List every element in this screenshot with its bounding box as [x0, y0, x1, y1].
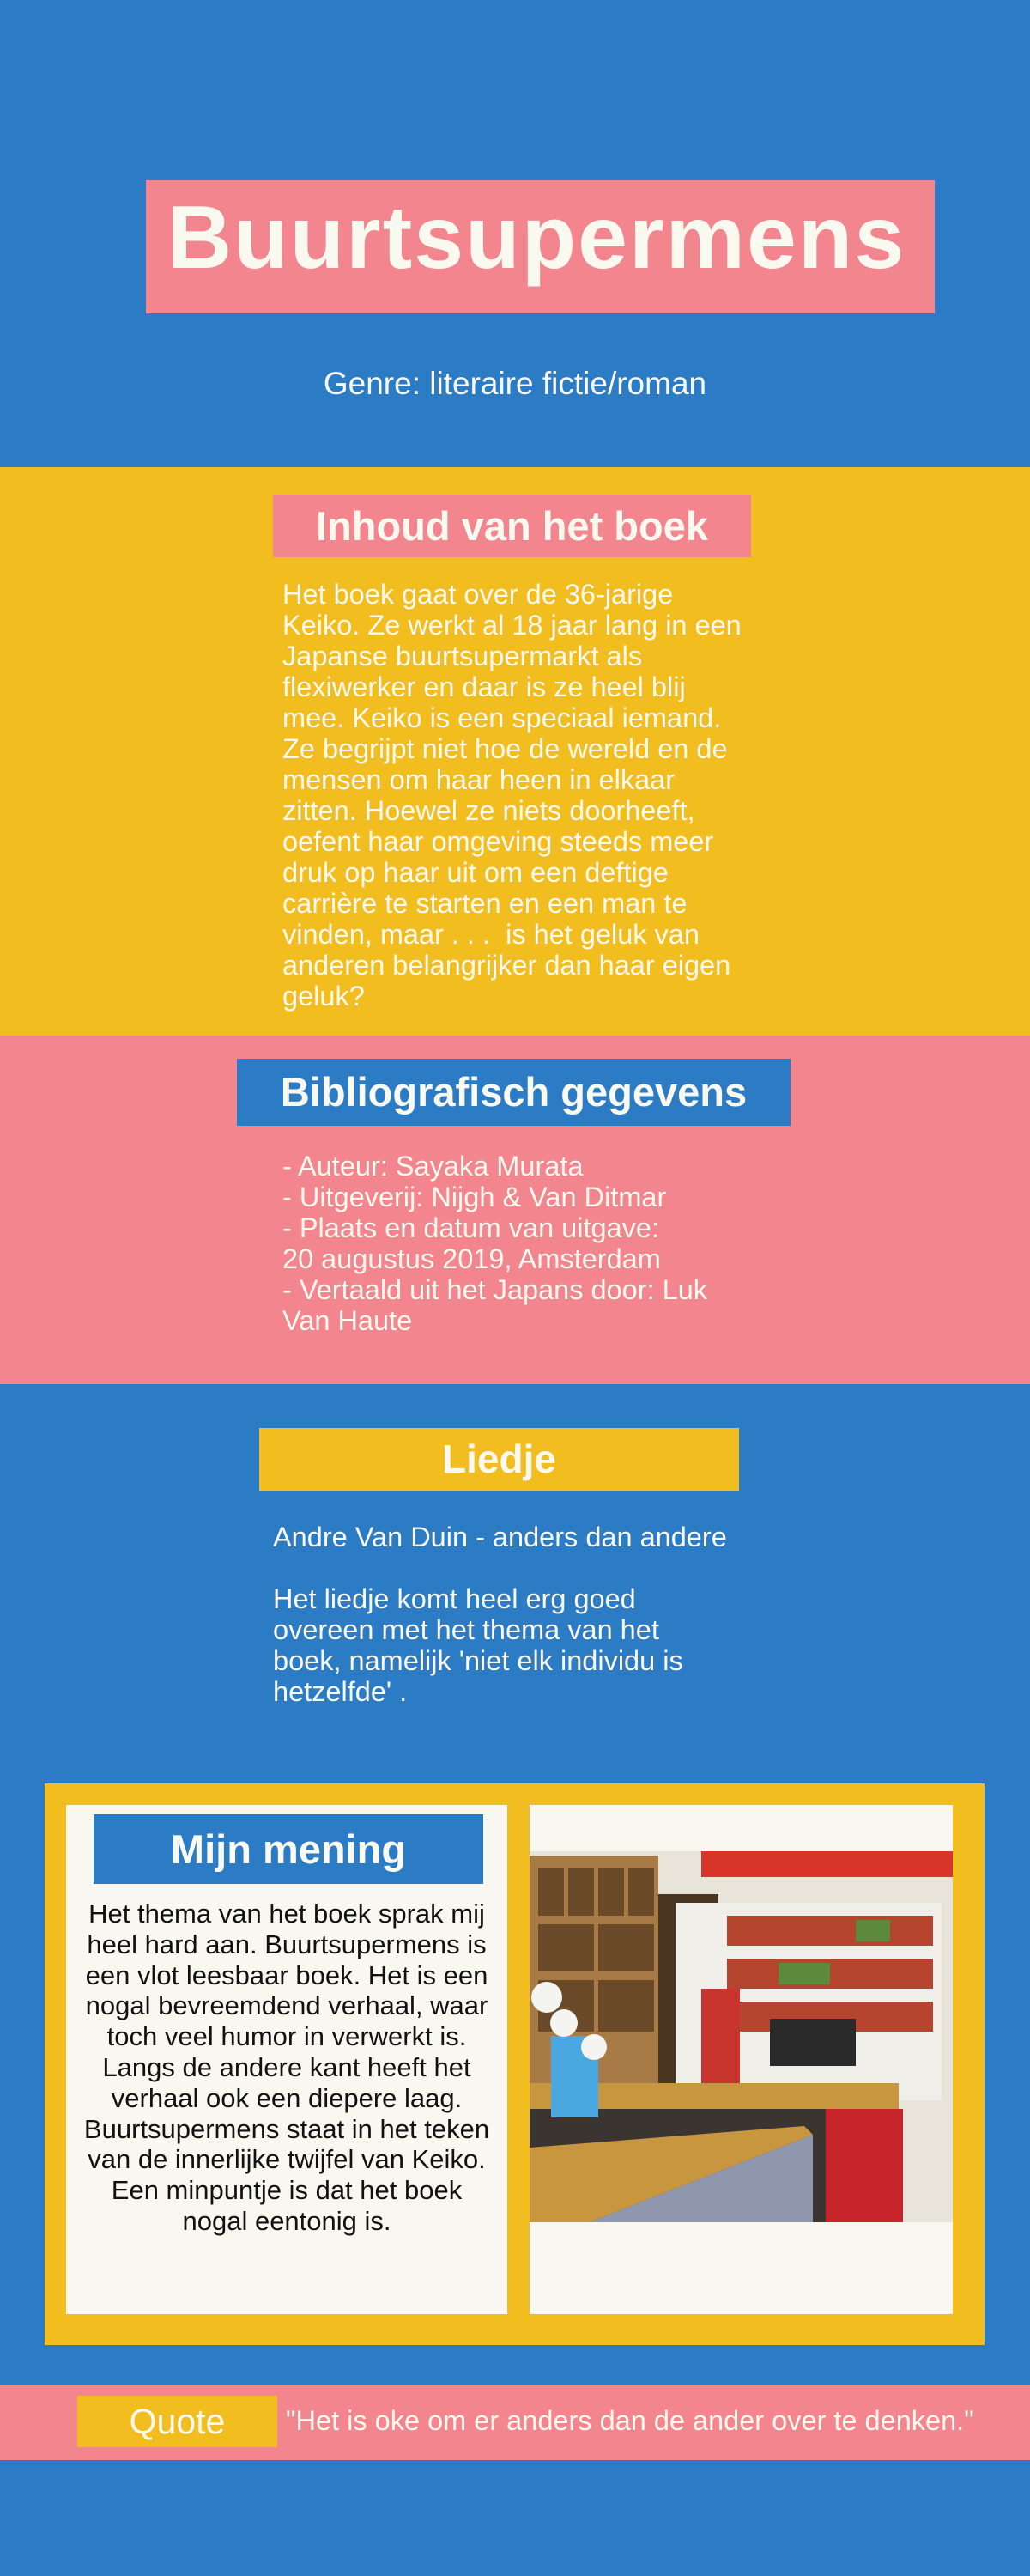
- text: mening: [84, 1899, 489, 2236]
- list: bibliografisch: - Auteur: Sayaka Murata: [282, 1151, 583, 1182]
- text: liedje: hetzelfde' .: [273, 1676, 407, 1707]
- title: Buurtsupermens: [167, 188, 906, 288]
- text: inhoud: vinden, maar . . . is het geluk van: [282, 919, 700, 950]
- list: bibliografisch: - Plaats en datum van uitgave:: [282, 1212, 659, 1243]
- panel: mening: [45, 1783, 985, 2345]
- photo: supermarket counter: [530, 1851, 953, 2222]
- text: inhoud: zitten. Hoewel ze niets doorheeft,: [282, 795, 695, 826]
- text: mening: nogal bevreemdend verhaal, waar: [86, 1990, 488, 2020]
- text: quote: "Het is oke om er anders dan de ander over te denken.": [286, 2405, 974, 2436]
- panel: inhoud: [0, 467, 1030, 1036]
- text: mening: Langs de andere kant heeft het: [102, 2052, 471, 2082]
- text: mening: van de innerlijke twijfel van Keiko.: [88, 2144, 486, 2174]
- text: mening: Het thema van het boek sprak mij: [88, 1899, 485, 1929]
- text: inhoud: geluk?: [282, 981, 365, 1012]
- text: liedje: Andre Van Duin - anders dan andere: [273, 1522, 727, 1552]
- text: liedje: Het liedje komt heel erg goed: [273, 1583, 636, 1614]
- text: inhoud: oefent haar omgeving steeds meer: [282, 826, 713, 857]
- card: photo: [530, 1805, 953, 2314]
- text: inhoud: anderen belangrijker dan haar eigen: [282, 950, 730, 981]
- heading: inhoud: Inhoud van het boek: [316, 503, 708, 549]
- heading: liedje: Liedje: [442, 1437, 556, 1481]
- heading: liedje: [259, 1428, 739, 1491]
- heading: inhoud: [273, 495, 751, 557]
- list: bibliografisch: - Uitgeverij: Nijgh & Van Ditmar: [282, 1182, 666, 1212]
- text: liedje: [273, 1522, 727, 1707]
- text: inhoud: Japanse buurtsupermarkt als: [282, 641, 642, 671]
- text: inhoud: druk op haar uit om een deftige: [282, 857, 669, 888]
- heading: bibliografisch: Bibliografisch gegevens: [281, 1069, 747, 1115]
- list: bibliografisch: [282, 1151, 707, 1336]
- text: liedje: boek, namelijk 'niet elk individu is: [273, 1645, 683, 1676]
- text: mening: Buurtsupermens staat in het teken: [84, 2114, 489, 2144]
- panel: bibliografisch: [0, 1036, 1030, 1384]
- text: inhoud: flexiwerker en daar is ze heel blij: [282, 671, 686, 702]
- list: bibliografisch: - Vertaald uit het Japans door: Luk: [282, 1274, 707, 1305]
- text: inhoud: mensen om haar heen in elkaar: [282, 764, 675, 795]
- text: inhoud: carrière te starten en een man te: [282, 888, 688, 919]
- text: inhoud: Ze begrijpt niet hoe de wereld en de: [282, 733, 728, 764]
- text: mening: toch veel humor in verwerkt is.: [107, 2021, 466, 2051]
- text: inhoud: Het boek gaat over de 36-jarige: [282, 579, 673, 610]
- text: inhoud: mee. Keiko is een speciaal iemand.: [282, 702, 721, 733]
- text: mening: een vlot leesbaar boek. Het is een: [86, 1960, 488, 1990]
- heading: mijn mening: [94, 1814, 483, 1884]
- genre: Genre: literaire fictie/roman: [324, 366, 706, 401]
- text: liedje: overeen met het thema van het: [273, 1614, 659, 1645]
- heading: mijn mening: Mijn mening: [171, 1826, 406, 1872]
- label: quote: Quote: [130, 2402, 225, 2441]
- text: mening: Een minpuntje is dat het boek: [112, 2175, 462, 2205]
- text: inhoud: [282, 579, 742, 1012]
- card: mening text: [66, 1805, 507, 2314]
- panel: quote: [0, 2385, 1030, 2460]
- label: quote: [77, 2396, 277, 2447]
- text: inhoud: Keiko. Ze werkt al 18 jaar lang in een: [282, 610, 742, 641]
- text: mening: nogal eentonig is.: [182, 2206, 391, 2236]
- text: mening: heel hard aan. Buurtsupermens is: [87, 1929, 487, 1959]
- text: mening: verhaal ook een diepere laag.: [112, 2083, 462, 2113]
- list: bibliografisch: 20 augustus 2019, Amsterdam: [282, 1243, 661, 1274]
- list: bibliografisch: Van Haute: [282, 1305, 412, 1336]
- heading: bibliografisch: [237, 1059, 791, 1126]
